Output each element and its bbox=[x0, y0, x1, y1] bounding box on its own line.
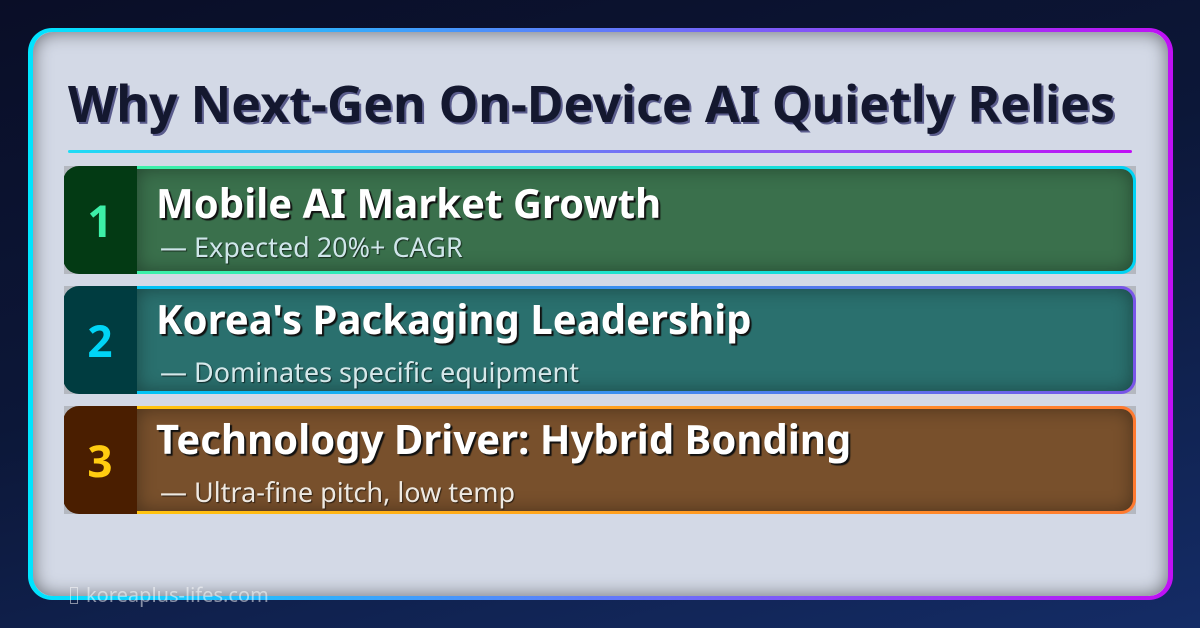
item 1 body bbox=[137, 166, 1136, 274]
item 1 heading: Mobile AI Market Growth bbox=[156, 175, 661, 230]
item 2 body bbox=[137, 286, 1136, 394]
footer source: koreaplus-lifes.com bbox=[86, 581, 269, 608]
number badge 2 bbox=[63, 286, 137, 394]
number badge 3: 3 bbox=[87, 430, 113, 490]
item 2 heading: Korea's Packaging Leadership bbox=[156, 291, 752, 346]
number badge 3 bbox=[63, 406, 137, 514]
number badge 1 bbox=[63, 166, 137, 274]
item 3 body bbox=[137, 406, 1136, 514]
item 1 detail: — Expected 20%+ CAGR bbox=[160, 228, 463, 265]
panel: item 1 mobile AI market growth bbox=[64, 166, 1136, 274]
number badge 1: 1 bbox=[87, 190, 113, 250]
item 3 heading: Technology Driver: Hybrid Bonding bbox=[156, 411, 851, 466]
title underline bbox=[68, 150, 1132, 153]
title: Why Next-Gen On-Device AI Quietly Relies bbox=[68, 69, 1115, 137]
number badge 2: 2 bbox=[87, 310, 113, 370]
panel: item 3 hybrid bonding bbox=[64, 406, 1136, 514]
item 3 detail: — Ultra-fine pitch, low temp bbox=[160, 473, 515, 510]
item 2 detail: — Dominates specific equipment bbox=[160, 353, 579, 390]
panel: item 2 packaging leadership bbox=[64, 286, 1136, 394]
